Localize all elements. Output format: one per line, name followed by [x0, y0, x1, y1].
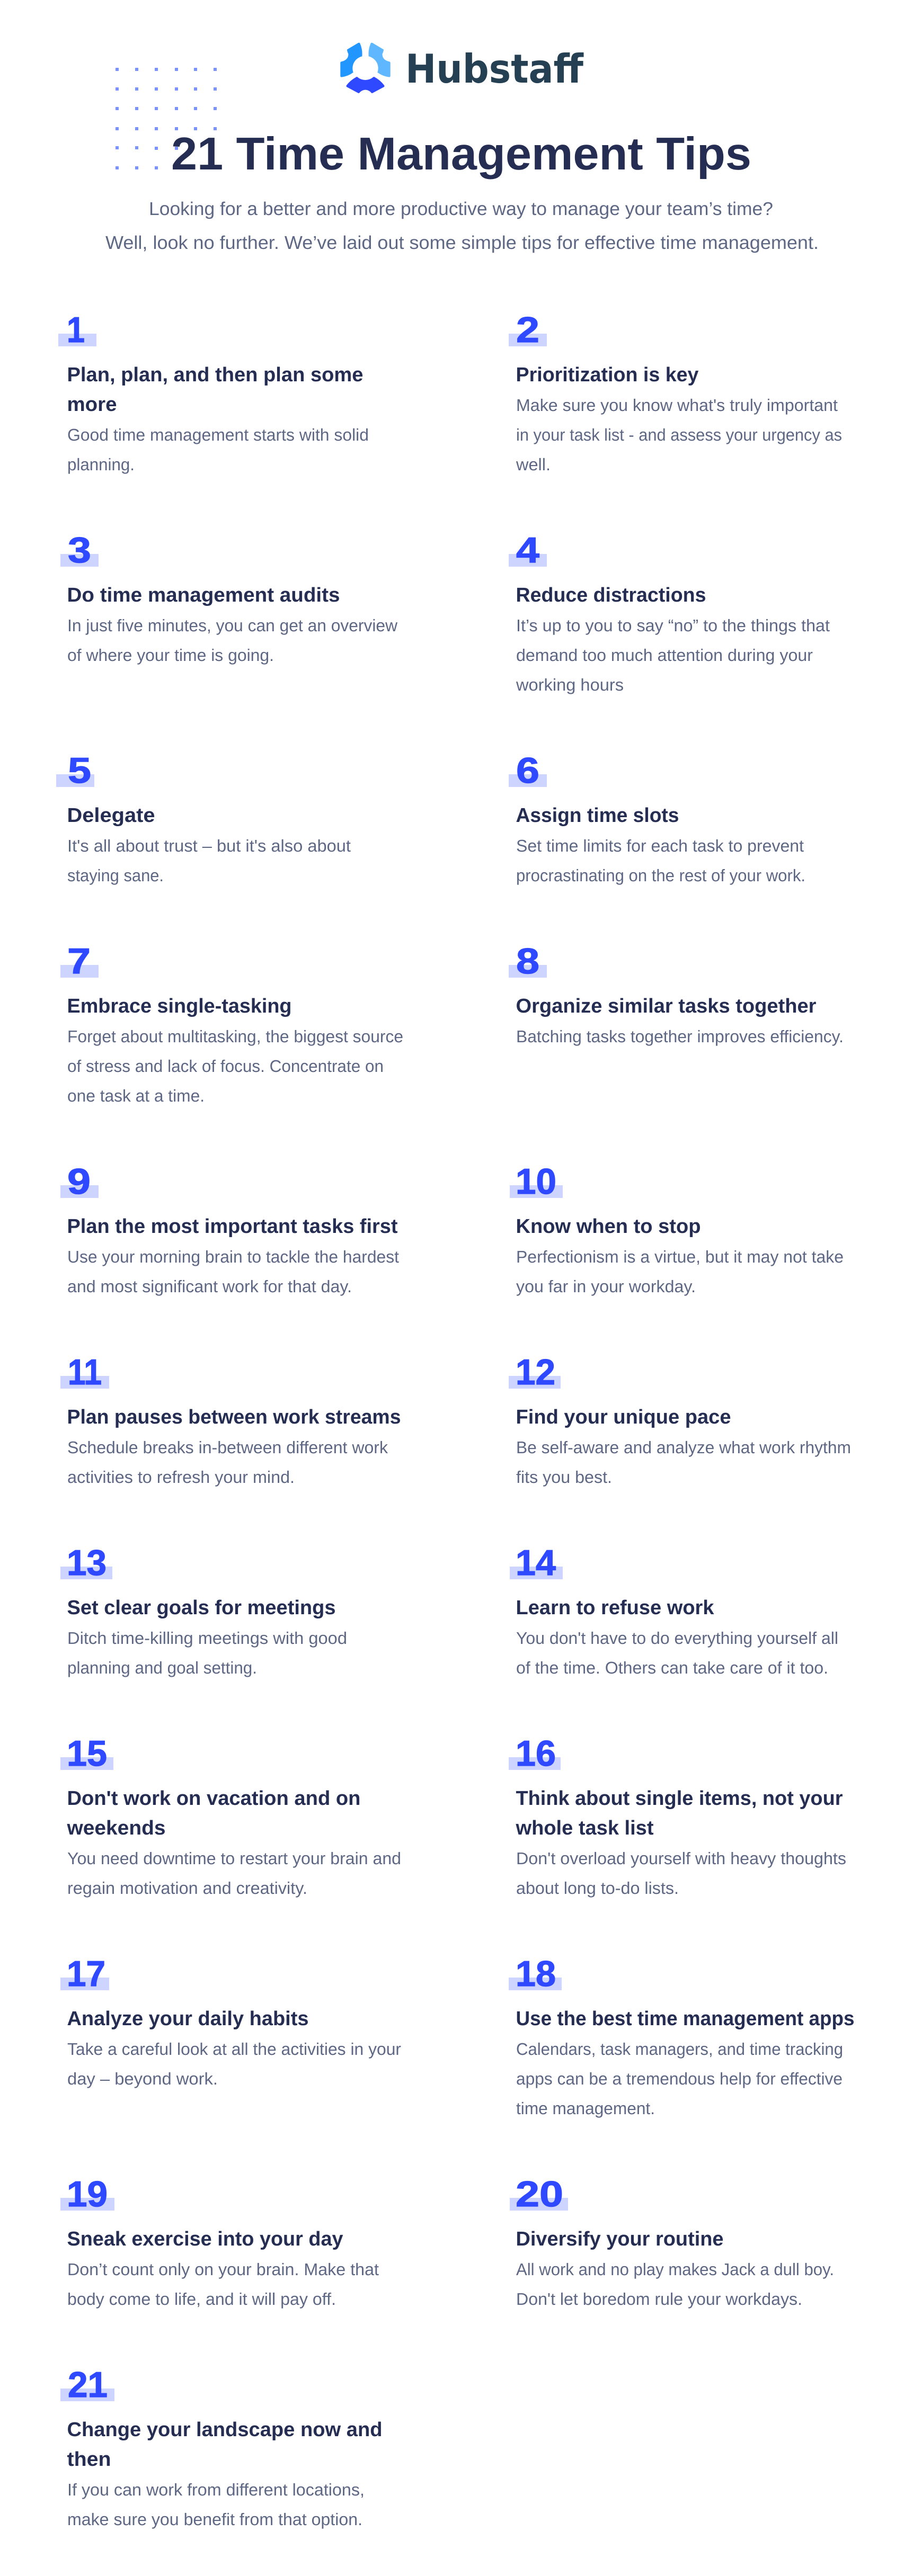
- description: It's all about trust – but it's also about: [67, 836, 351, 855]
- heading: Plan the most important tasks first: [67, 1215, 398, 1238]
- description: Don’t count only on your brain. Make that: [67, 2260, 379, 2279]
- tip 13: [60, 1543, 347, 1677]
- description: You don't have to do everything yourself all: [516, 1629, 838, 1648]
- description: of the time. Others can take care of it too.: [516, 1658, 828, 1677]
- number 20: 20: [516, 2174, 563, 2214]
- description: activities to refresh your mind.: [67, 1468, 295, 1487]
- tip 4: [509, 530, 830, 694]
- heading: Organize similar tasks together: [516, 995, 817, 1017]
- heading: Assign time slots: [516, 804, 679, 827]
- description: [516, 1629, 838, 1677]
- tip 20: [510, 2174, 834, 2309]
- description: one task at a time.: [67, 1086, 205, 1105]
- heading: Analyze your daily habits: [67, 2008, 308, 2030]
- number 8: [509, 941, 547, 981]
- tip 3: [60, 530, 398, 665]
- heading: Plan pauses between work streams: [67, 1406, 401, 1428]
- description: apps can be a tremendous help for effective: [516, 2069, 843, 2088]
- tip 16: [509, 1733, 846, 1898]
- description: procrastinating on the rest of your work.: [516, 866, 805, 885]
- number 3: 3: [68, 530, 91, 570]
- description: demand too much attention during your: [516, 646, 813, 665]
- description: [67, 836, 351, 885]
- tip 6: [509, 750, 805, 885]
- number 1: 1: [67, 310, 85, 350]
- description: Be self-aware and analyze what work rhythm: [516, 1438, 851, 1457]
- tip 19: [60, 2174, 379, 2309]
- number 4: [509, 530, 547, 570]
- description: Schedule breaks in-between different work: [67, 1438, 388, 1457]
- heading: Use the best time management apps: [516, 2008, 854, 2030]
- tip 9: [60, 1161, 399, 1296]
- number 6: [509, 750, 547, 791]
- description: [516, 616, 830, 694]
- description: Don't let boredom rule your workdays.: [516, 2289, 802, 2309]
- heading: Find your unique pace: [516, 1406, 731, 1428]
- tip 7: [60, 941, 403, 1105]
- description: Take a careful look at all the activities in your: [67, 2040, 401, 2059]
- heading: Embrace single-tasking: [67, 995, 291, 1017]
- description: Batching tasks together improves efficiency.: [516, 1027, 844, 1046]
- number 16: 16: [516, 1733, 556, 1774]
- number 11: 11: [68, 1352, 102, 1392]
- heading: more: [67, 393, 117, 416]
- heading: weekends: [66, 1817, 165, 1839]
- tip 17: [60, 1954, 401, 2088]
- tip 21: [60, 2365, 383, 2529]
- description: fits you best.: [516, 1468, 612, 1487]
- description: [516, 1438, 851, 1487]
- description: time management.: [516, 2099, 655, 2118]
- description: [67, 1849, 401, 1898]
- tip 5: [56, 750, 351, 885]
- description: Don't overload yourself with heavy thoughts: [516, 1849, 846, 1868]
- icon: left blue segment: [340, 43, 362, 77]
- tip 1: [58, 310, 369, 474]
- number 1: [58, 310, 96, 350]
- intro text: Looking for a better and more productive way to manage your team’s time?: [149, 199, 773, 219]
- description: [516, 2260, 834, 2309]
- wordmark: Hubstaff: [405, 46, 584, 92]
- heading: Change your landscape now and: [67, 2419, 383, 2441]
- heading: then: [67, 2448, 111, 2471]
- title: 21 Time Management Tips: [171, 128, 751, 180]
- tip 2: [509, 310, 842, 474]
- tip 10: [510, 1161, 844, 1296]
- number 8: 8: [516, 941, 539, 981]
- heading: [67, 2419, 383, 2471]
- description: [516, 1247, 844, 1296]
- number 9: 9: [67, 1161, 91, 1202]
- description: You need downtime to restart your brain and: [67, 1849, 401, 1868]
- description: planning and goal setting.: [67, 1658, 257, 1677]
- description: Set time limits for each task to prevent: [516, 836, 804, 855]
- number 17: 17: [67, 1954, 105, 1994]
- heading: [67, 364, 364, 416]
- heading: [515, 1787, 843, 1839]
- icon: bottom dark-blue segment: [346, 77, 385, 93]
- description: working hours: [516, 675, 624, 694]
- heading: Learn to refuse work: [516, 1597, 714, 1619]
- description: Calendars, task managers, and time tracking: [516, 2040, 843, 2059]
- description: Perfectionism is a virtue, but it may not take: [516, 1247, 844, 1266]
- number 18: 18: [516, 1954, 556, 1994]
- description: in your task list - and assess your urgency as: [516, 425, 842, 444]
- description: [516, 2040, 843, 2118]
- heading: Set clear goals for meetings: [67, 1597, 336, 1619]
- heading: Diversify your routine: [516, 2228, 724, 2250]
- description: and most significant work for that day.: [67, 1277, 352, 1296]
- description: [67, 616, 398, 665]
- logo: Hubstaff: [340, 43, 584, 93]
- number 7: 7: [67, 941, 91, 981]
- intro text: [105, 199, 819, 253]
- number 4: 4: [516, 530, 539, 570]
- description: Use your morning brain to tackle the hardest: [67, 1247, 399, 1266]
- description: Good time management starts with solid: [67, 425, 369, 444]
- description: Forget about multitasking, the biggest source: [67, 1027, 403, 1046]
- description: day – beyond work.: [67, 2069, 218, 2088]
- number 5: [56, 750, 94, 791]
- tip 11: [60, 1352, 401, 1487]
- description: staying sane.: [67, 866, 164, 885]
- number 6: 6: [516, 750, 539, 791]
- heading: Do time management audits: [67, 584, 340, 606]
- heading: Sneak exercise into your day: [67, 2228, 343, 2250]
- number 9: [60, 1161, 99, 1202]
- description: about long to-do lists.: [516, 1879, 679, 1898]
- heading: Plan, plan, and then plan some: [67, 364, 364, 386]
- number 10: 10: [516, 1161, 556, 1202]
- decorative dot grid: [116, 68, 217, 169]
- heading: Prioritization is key: [516, 364, 698, 386]
- description: of where your time is going.: [67, 646, 274, 665]
- description: [516, 396, 842, 474]
- description: body come to life, and it will pay off.: [67, 2289, 336, 2309]
- heading: Know when to stop: [516, 1215, 701, 1238]
- number 14: 14: [516, 1543, 556, 1583]
- description: [67, 1438, 388, 1487]
- description: make sure you benefit from that option.: [67, 2510, 362, 2529]
- number 20: [510, 2174, 568, 2214]
- tip 15: [60, 1733, 401, 1898]
- description: [516, 836, 805, 885]
- number 12: 12: [516, 1352, 555, 1392]
- number 13: 13: [67, 1543, 107, 1583]
- number 21: 21: [68, 2365, 108, 2405]
- tip 8: [509, 941, 844, 1046]
- description: you far in your workday.: [516, 1277, 696, 1296]
- icon: right light-blue segment: [368, 43, 391, 77]
- description: [67, 425, 369, 474]
- heading: Think about single items, not your: [516, 1787, 843, 1810]
- description: In just five minutes, you can get an overview: [67, 616, 398, 635]
- number 5: 5: [68, 750, 91, 791]
- description: [67, 1629, 347, 1677]
- number 2: [509, 310, 547, 350]
- heading: [66, 1787, 361, 1839]
- intro text: Well, look no further. We’ve laid out some simple tips for effective time management.: [105, 232, 819, 253]
- number 3: [60, 530, 99, 570]
- description: [67, 2040, 401, 2088]
- heading: Don't work on vacation and on: [67, 1787, 360, 1810]
- description: Ditch time-killing meetings with good: [67, 1629, 347, 1648]
- description: planning.: [67, 455, 135, 474]
- description: well.: [516, 455, 551, 474]
- number 15: 15: [67, 1733, 107, 1774]
- heading: Delegate: [67, 804, 155, 827]
- number 2: 2: [516, 310, 539, 350]
- description: of stress and lack of focus. Concentrate on: [67, 1057, 384, 1076]
- description: It’s up to you to say “no” to the things that: [516, 616, 830, 635]
- tip 12: [509, 1352, 851, 1487]
- description: [67, 2480, 365, 2529]
- description: All work and no play makes Jack a dull boy.: [516, 2260, 834, 2279]
- tip 18: [509, 1954, 854, 2118]
- heading: Reduce distractions: [516, 584, 706, 606]
- tip 14: [510, 1543, 838, 1677]
- description: [67, 2260, 379, 2309]
- number 19: 19: [67, 2174, 108, 2214]
- description: [67, 1247, 399, 1296]
- description: Make sure you know what's truly important: [516, 396, 838, 415]
- heading: whole task list: [515, 1817, 654, 1839]
- number 7: [60, 941, 99, 981]
- description: If you can work from different locations,: [67, 2480, 365, 2499]
- description: [67, 1027, 403, 1105]
- description: regain motivation and creativity.: [67, 1879, 307, 1898]
- description: [516, 1849, 846, 1898]
